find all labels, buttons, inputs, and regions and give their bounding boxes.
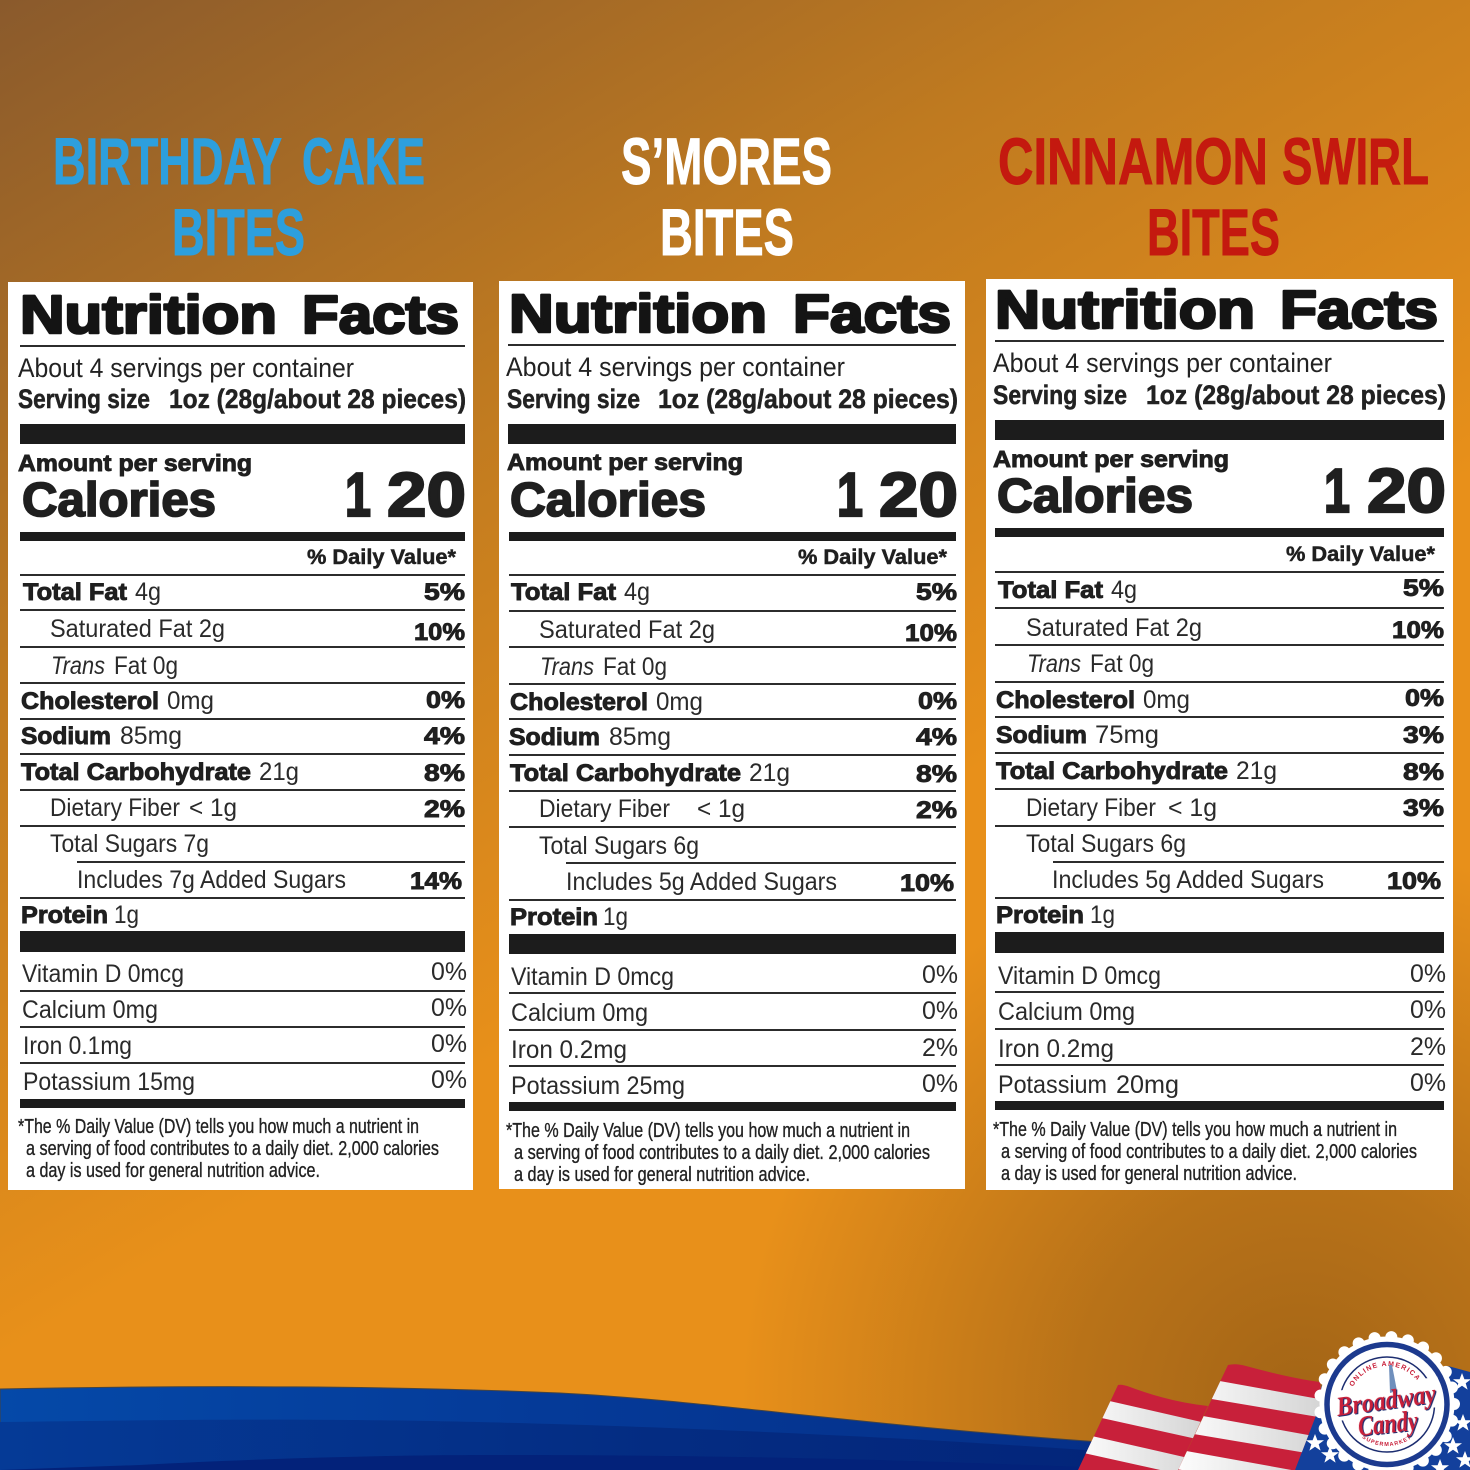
- nutrient rows: 8%: [1403, 759, 1444, 786]
- vitamins and minerals: 0%: [922, 961, 958, 989]
- heading: S'mores Bites: BITES: [660, 195, 794, 269]
- calories: Calories: [510, 474, 706, 527]
- calories: 1: [345, 461, 371, 530]
- serving information: 1oz (28g/about 28 pieces): [1146, 380, 1446, 410]
- nutrient rows: Total Sugars 7g: [50, 830, 209, 858]
- nutrition title: [995, 280, 1438, 340]
- nutrient rows: Total Sugars 6g: [539, 832, 699, 860]
- serving information: About 4 servings per container: [18, 353, 354, 383]
- nutrient rows: Protein: [21, 902, 108, 929]
- calories: Amount per serving: [18, 450, 252, 476]
- nutrient rows: 0%: [918, 688, 957, 715]
- calories: Amount per serving: [993, 446, 1229, 472]
- vitamins and minerals: [20, 958, 467, 1108]
- nutrient rows: Includes 7g Added Sugars: [77, 866, 346, 894]
- footnote: *The % Daily Value (DV) tells you how much a nutrient in: [506, 1120, 910, 1142]
- calories: 1: [1324, 457, 1350, 526]
- nutrient rows: 3%: [1403, 795, 1444, 822]
- nutrient rows: 10%: [1387, 868, 1441, 895]
- vitamins and minerals: [995, 960, 1446, 1110]
- badge: Broadway Candy logo: ONLINE AMERICAN: [1350, 1361, 1420, 1386]
- heading: Cinnamon Swirl Bites: BITES: [1147, 195, 1280, 269]
- nutrition title: Nutrition: [995, 280, 1255, 340]
- vitamins and minerals: Potassium: [998, 1071, 1107, 1099]
- nutrient rows: Saturated Fat 2g: [1026, 614, 1202, 642]
- nutrient rows: 1g: [114, 901, 139, 929]
- nutrient rows: Cholesterol: [996, 687, 1135, 714]
- nutrition title: Facts: [1280, 280, 1438, 340]
- nutrient rows: Trans: [51, 652, 105, 680]
- vitamins and minerals: 2%: [1410, 1033, 1446, 1061]
- nutrient rows: 75mg: [1095, 721, 1159, 749]
- heading: Birthday Cake Bites: BITES: [172, 195, 305, 269]
- nutrient rows: 0mg: [167, 687, 214, 715]
- vitamins and minerals: [509, 961, 958, 1111]
- heading: Cinnamon Swirl Bites: CINNAMON: [998, 124, 1268, 198]
- calories: 1: [837, 461, 863, 530]
- nutrient rows: Includes 5g Added Sugars: [1052, 866, 1324, 894]
- nutrient rows: Total Fat: [998, 577, 1103, 604]
- calories: [18, 450, 466, 576]
- nutrient rows: Dietary Fiber: [539, 795, 670, 823]
- vitamins and minerals: Vitamin D 0mcg: [22, 960, 184, 988]
- heading: Birthday Cake Bites: CAKE: [302, 124, 425, 198]
- calories: 20: [1367, 457, 1446, 526]
- footnote: [18, 1116, 439, 1182]
- nutrient rows: Total Carbohydrate: [21, 759, 251, 786]
- nutrient rows: 85mg: [609, 723, 671, 751]
- nutrient rows: Total Fat: [23, 579, 127, 606]
- serving information: [506, 344, 958, 444]
- nutrient rows: Sodium: [21, 723, 111, 750]
- nutrient rows: [509, 578, 957, 954]
- calories: Amount per serving: [507, 449, 743, 475]
- nutrient rows: Sodium: [996, 722, 1087, 749]
- footnote: a serving of food contributes to a daily diet. 2,000 calories: [514, 1142, 930, 1164]
- nutrient rows: Trans: [1027, 650, 1081, 678]
- badge: Broadway Candy logo: Broadway: [1334, 1378, 1438, 1422]
- calories: Calories: [22, 474, 216, 527]
- vitamins and minerals: Iron 0.1mg: [23, 1032, 132, 1060]
- nutrient rows: 21g: [749, 759, 790, 787]
- vitamins and minerals: 0%: [922, 1070, 958, 1098]
- nutrition title: Facts: [302, 285, 459, 345]
- nutrient rows: 0%: [1405, 685, 1444, 712]
- heading: Birthday Cake Bites: [53, 124, 425, 269]
- nutrient rows: 2%: [916, 797, 957, 824]
- serving information: Serving size: [18, 384, 150, 414]
- vitamins and minerals: 0%: [431, 1030, 467, 1058]
- heading: S'mores Bites: S’MORES: [621, 124, 832, 198]
- vitamins and minerals: Potassium 15mg: [23, 1068, 195, 1096]
- calories: [507, 449, 958, 576]
- nutrient rows: 10%: [414, 619, 465, 646]
- flag canton with stars: [1295, 1366, 1470, 1470]
- nutrient rows: Cholesterol: [21, 688, 159, 715]
- footnote: a day is used for general nutrition advice.: [26, 1160, 320, 1182]
- nutrient rows: < 1g: [189, 794, 237, 822]
- panel: Birthday Cake nutrition facts: [8, 282, 473, 1190]
- nutrient rows: Sodium: [509, 724, 600, 751]
- serving information: About 4 servings per container: [506, 352, 845, 382]
- nutrient rows: 8%: [916, 761, 957, 788]
- serving information: About 4 servings per container: [993, 348, 1332, 378]
- nutrient rows: 1g: [603, 903, 628, 931]
- flag stripes: left wave: [1078, 1384, 1208, 1470]
- vitamins and minerals: Iron 0.2mg: [998, 1035, 1114, 1063]
- nutrient rows: 0mg: [1143, 686, 1190, 714]
- vitamins and minerals: Iron 0.2mg: [511, 1036, 627, 1064]
- nutrient rows: 5%: [916, 579, 957, 606]
- heading: Birthday Cake Bites: BIRTHDAY: [53, 124, 282, 198]
- badge: Broadway Candy logo: Candy: [1356, 1406, 1420, 1443]
- nutrient rows: 85mg: [120, 722, 182, 750]
- nutrition title: Nutrition: [20, 285, 277, 345]
- vitamins and minerals: Vitamin D 0mcg: [998, 962, 1161, 990]
- nutrient rows: Dietary Fiber: [1026, 794, 1156, 822]
- nutrition title: Nutrition: [509, 284, 767, 344]
- serving information: [18, 345, 466, 444]
- nutrient rows: Saturated Fat 2g: [539, 616, 715, 644]
- serving information: Serving size: [993, 380, 1127, 410]
- nutrient rows: Fat 0g: [603, 653, 667, 681]
- flag stripes: right wave: [1178, 1364, 1321, 1470]
- nutrient rows: 10%: [1392, 617, 1444, 644]
- calories: Calories: [997, 470, 1193, 523]
- serving information: 1oz (28g/about 28 pieces): [658, 384, 958, 414]
- nutrient rows: Fat 0g: [114, 652, 178, 680]
- serving information: [993, 340, 1446, 440]
- nutrient rows: 0%: [426, 687, 465, 714]
- nutrient rows: Protein: [510, 904, 598, 931]
- nutrient rows: Fat 0g: [1090, 650, 1154, 678]
- blue wave band: [0, 1387, 1100, 1470]
- nutrient rows: Saturated Fat 2g: [50, 615, 225, 643]
- footnote: a day is used for general nutrition advice.: [1001, 1163, 1297, 1185]
- footnote: *The % Daily Value (DV) tells you how much a nutrient in: [18, 1116, 419, 1138]
- nutrient rows: Total Carbohydrate: [996, 758, 1228, 785]
- vitamins and minerals: 20mg: [1116, 1071, 1179, 1099]
- footnote: a day is used for general nutrition advice.: [514, 1164, 810, 1186]
- nutrient rows: 1g: [1090, 901, 1115, 929]
- panel: Cinnamon Swirl nutrition facts: [986, 279, 1453, 1190]
- panel: S'mores nutrition facts: [499, 281, 965, 1189]
- nutrient rows: 21g: [259, 758, 299, 786]
- nutrient rows: Total Carbohydrate: [510, 760, 741, 787]
- vitamins and minerals: Vitamin D 0mcg: [511, 963, 674, 991]
- nutrient rows: 21g: [1236, 757, 1277, 785]
- vitamins and minerals: Calcium 0mg: [22, 996, 158, 1024]
- nutrient rows: [995, 575, 1444, 953]
- vitamins and minerals: 0%: [1410, 996, 1446, 1024]
- nutrient rows: Cholesterol: [510, 689, 648, 716]
- footnote: a serving of food contributes to a daily diet. 2,000 calories: [26, 1138, 439, 1160]
- calories: 20: [879, 461, 958, 530]
- serving information: 1oz (28g/about 28 pieces): [169, 384, 466, 414]
- nutrient rows: 0mg: [656, 688, 703, 716]
- vitamins and minerals: 0%: [431, 994, 467, 1022]
- calories: % Daily Value*: [1286, 543, 1436, 566]
- vitamins and minerals: 0%: [922, 997, 958, 1025]
- vitamins and minerals: Potassium 25mg: [511, 1072, 685, 1100]
- vitamins and minerals: 0%: [431, 1066, 467, 1094]
- badge: Broadway Candy logo: [1314, 1331, 1460, 1470]
- nutrient rows: Trans: [540, 653, 594, 681]
- calories: % Daily Value*: [798, 546, 948, 569]
- calories: % Daily Value*: [307, 546, 457, 569]
- nutrient rows: 4g: [135, 578, 161, 606]
- nutrient rows: 4g: [624, 578, 650, 606]
- vitamins and minerals: 0%: [1410, 960, 1446, 988]
- nutrient rows: Total Fat: [511, 579, 616, 606]
- nutrient rows: Includes 5g Added Sugars: [566, 868, 837, 896]
- nutrient rows: 2%: [424, 796, 465, 823]
- nutrient rows: Protein: [996, 902, 1084, 929]
- vitamins and minerals: 2%: [922, 1034, 958, 1062]
- vitamins and minerals: Calcium 0mg: [511, 999, 648, 1027]
- heading: S'mores Bites: [621, 124, 832, 269]
- nutrient rows: < 1g: [1168, 794, 1217, 822]
- nutrient rows: 4%: [916, 724, 957, 751]
- vitamins and minerals: Calcium 0mg: [998, 998, 1135, 1026]
- badge: Broadway Candy logo: SUPERMARKET: [1362, 1436, 1410, 1446]
- nutrient rows: 5%: [424, 579, 465, 606]
- calories: 20: [387, 461, 466, 530]
- nutrition title: [509, 284, 951, 344]
- nutrient rows: 5%: [1403, 575, 1444, 602]
- nutrient rows: Dietary Fiber: [50, 794, 180, 822]
- nutrient rows: Total Sugars 6g: [1026, 830, 1186, 858]
- nutrition title: [20, 285, 459, 345]
- nutrient rows: < 1g: [697, 795, 745, 823]
- footnote: [993, 1119, 1417, 1185]
- nutrient rows: 4%: [424, 723, 465, 750]
- nutrient rows: 8%: [424, 760, 465, 787]
- heading: Cinnamon Swirl Bites: [998, 124, 1429, 269]
- calories: [993, 446, 1446, 573]
- serving information: Serving size: [507, 384, 640, 414]
- nutrient rows: 10%: [900, 870, 954, 897]
- nutrition title: Facts: [793, 284, 951, 344]
- nutrient rows: [20, 578, 465, 952]
- nutrient rows: 4g: [1111, 576, 1137, 604]
- nutrient rows: 10%: [905, 620, 957, 647]
- nutrient rows: 3%: [1403, 722, 1444, 749]
- vitamins and minerals: 0%: [431, 958, 467, 986]
- nutrient rows: 14%: [410, 868, 462, 895]
- footnote: [506, 1120, 930, 1186]
- vitamins and minerals: 0%: [1410, 1069, 1446, 1097]
